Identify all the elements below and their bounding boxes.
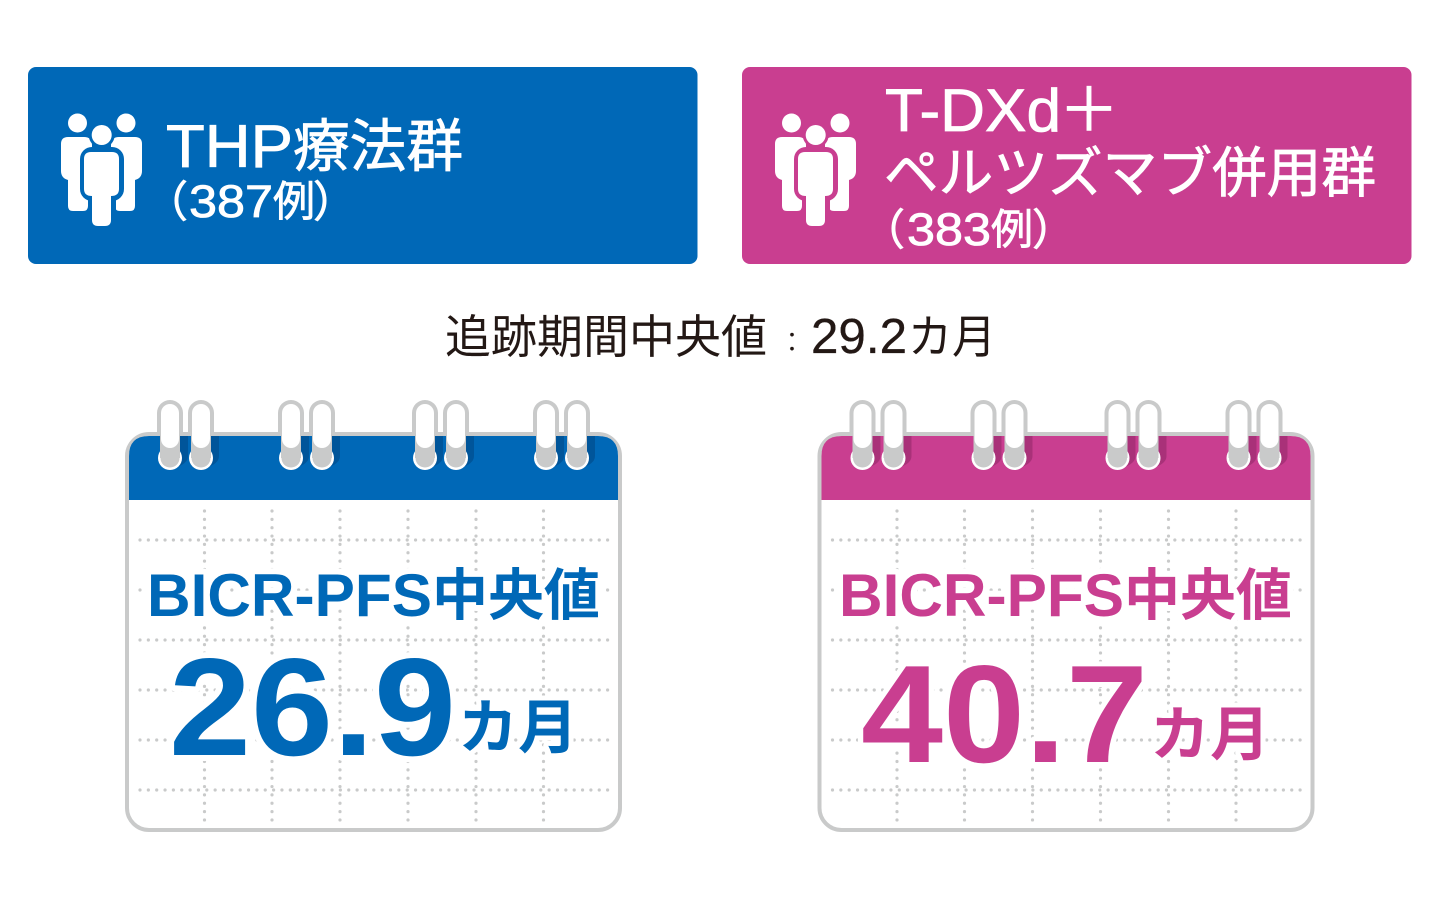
calendar header	[129, 436, 618, 500]
heading: T-DXd plus: ＋	[1059, 77, 1119, 144]
patient count: 387	[189, 176, 273, 227]
patient count	[145, 176, 356, 227]
icon: group of people	[61, 114, 142, 230]
label: BICR-PFS median: BICR-PFS	[147, 562, 432, 629]
heading: T-DXd plus: T-DXd	[885, 77, 1061, 144]
follow-up median text: 29.2	[811, 310, 907, 364]
calendar rings	[157, 400, 595, 470]
unit: months: カ月	[1150, 702, 1270, 768]
heading: pertuzumab combination: ペルツズマブ併用群	[884, 143, 1376, 204]
value: 40.7: 40.7	[861, 637, 1148, 792]
icon: group of people	[775, 114, 856, 230]
patient count: 例	[991, 206, 1033, 253]
label: BICR-PFS median: BICR-PFS	[839, 562, 1124, 629]
follow-up median text	[445, 310, 996, 364]
patient count: ）	[313, 179, 356, 227]
value: 26.9: 26.9	[169, 630, 456, 785]
patient count: ）	[1032, 207, 1075, 255]
panel: T-DXd + pertuzumab group	[742, 67, 1412, 264]
label: BICR-PFS median: 中央値	[432, 564, 600, 627]
panel: calendar T-DXd + pertuzumab	[820, 400, 1312, 830]
follow-up median text: 追跡期間中央値	[445, 311, 767, 363]
patient count	[862, 204, 1075, 255]
patient count: （	[145, 179, 188, 227]
patient count: 383	[907, 204, 991, 255]
heading: THP therapy: 療法群	[293, 115, 463, 179]
panel: calendar THP	[127, 400, 620, 830]
label: BICR-PFS median: 中央値	[1124, 564, 1292, 627]
patient count: 例	[273, 178, 315, 225]
unit: months: カ月	[458, 695, 578, 761]
heading: THP therapy: THP	[166, 113, 293, 180]
label: BICR-PFS median	[839, 562, 1292, 629]
follow-up median text: カ月	[908, 311, 996, 363]
heading: THP therapy	[166, 113, 463, 180]
patient count: （	[862, 207, 905, 255]
label: BICR-PFS median	[147, 562, 600, 629]
follow-up median text: ：	[778, 327, 806, 358]
panel: THP therapy group	[28, 67, 698, 264]
